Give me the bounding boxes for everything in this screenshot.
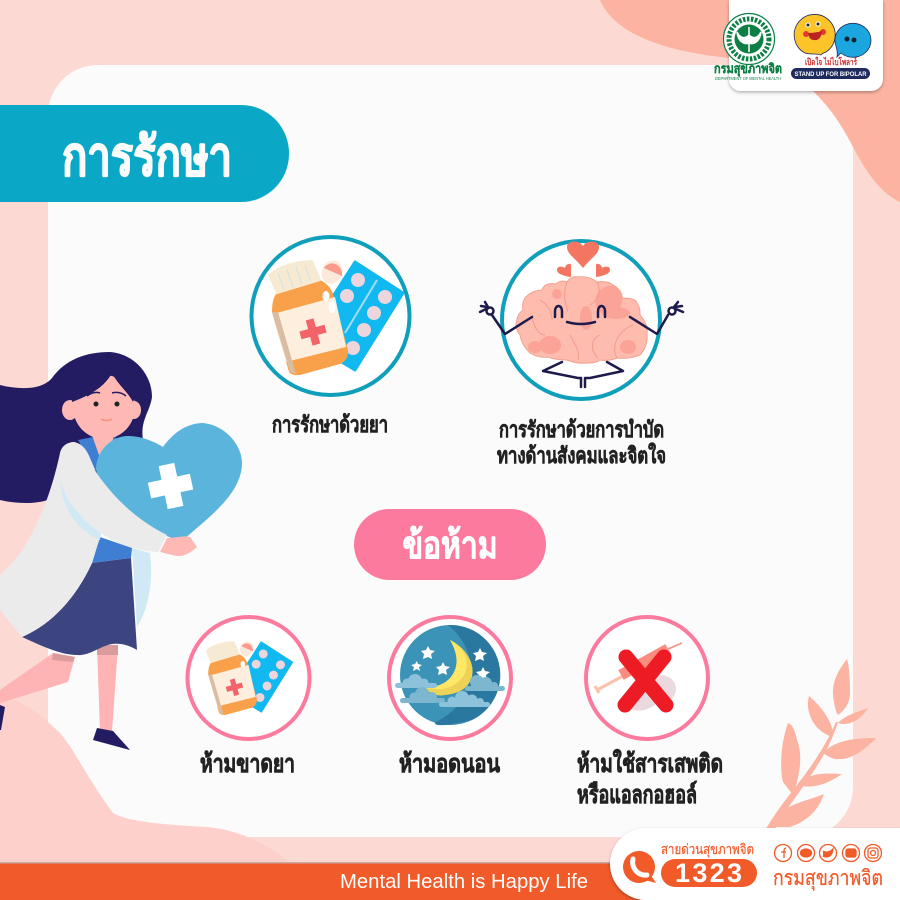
- icon: meditating brain: [480, 241, 683, 399]
- label: no drugs or alcohol: ห้ามใช้สารเสพติด: [577, 748, 723, 778]
- title banner: [0, 105, 289, 202]
- heading pill: prohibitions: ข้อห้าม: [402, 525, 498, 567]
- decoration: plant: [766, 659, 876, 829]
- logo: stand up for bipolar: [791, 14, 871, 79]
- footer band: Mental Health is Happy Life: [340, 871, 588, 893]
- footer band: [0, 862, 640, 900]
- icon: no drugs: [586, 617, 708, 739]
- social media icons: [774, 844, 882, 862]
- label: psychosocial therapy: [497, 417, 666, 468]
- label: psychosocial therapy: การรักษาด้วยการบำบัด: [499, 417, 664, 442]
- background blob: bottom left: [0, 697, 290, 863]
- heading pill: prohibitions: [354, 509, 546, 580]
- illustration: nurse holding heart: [0, 352, 242, 750]
- label: psychosocial therapy: ทางด้านสังคมและจิตใจ: [497, 442, 666, 468]
- label: do not skip sleep: ห้ามอดนอน: [399, 750, 500, 778]
- label: medicine: การรักษาด้วยยา: [272, 412, 388, 437]
- logo: stand up for bipolar: STAND UP FOR BIPOLAR: [794, 71, 867, 78]
- hotline number: สายด่วนสุขภาพจิต: [661, 841, 754, 858]
- hotline number: 1323: [675, 858, 742, 888]
- footer organisation name: กรมสุขภาพจิต: [773, 867, 883, 891]
- label: no drugs or alcohol: [577, 748, 723, 809]
- logo: stand up for bipolar: เปิดใจ ไม่ไบโพลาร์: [805, 56, 857, 67]
- icon: do not skip medicine: [188, 617, 310, 739]
- title text: การรักษา: [62, 127, 232, 187]
- icon: phone bubble: [623, 851, 656, 883]
- footer hotline panel: [610, 828, 900, 900]
- icon: medicine circle: [252, 237, 410, 395]
- header logo panel: [714, 0, 883, 91]
- icon: moon and clouds: [389, 617, 511, 739]
- logo: department seal: กรมสุขภาพจิต: [714, 61, 782, 77]
- logo: department seal: DEPARTMENT OF MENTAL HEALTH: [715, 76, 781, 81]
- logo: department seal: [714, 14, 782, 81]
- label: do not skip medicine: ห้ามขาดยา: [200, 750, 295, 778]
- background card: [48, 65, 853, 837]
- background blob: top right: [600, 0, 900, 202]
- hotline number: [661, 841, 757, 888]
- label: no drugs or alcohol: หรือแอลกอฮอล์: [577, 780, 697, 809]
